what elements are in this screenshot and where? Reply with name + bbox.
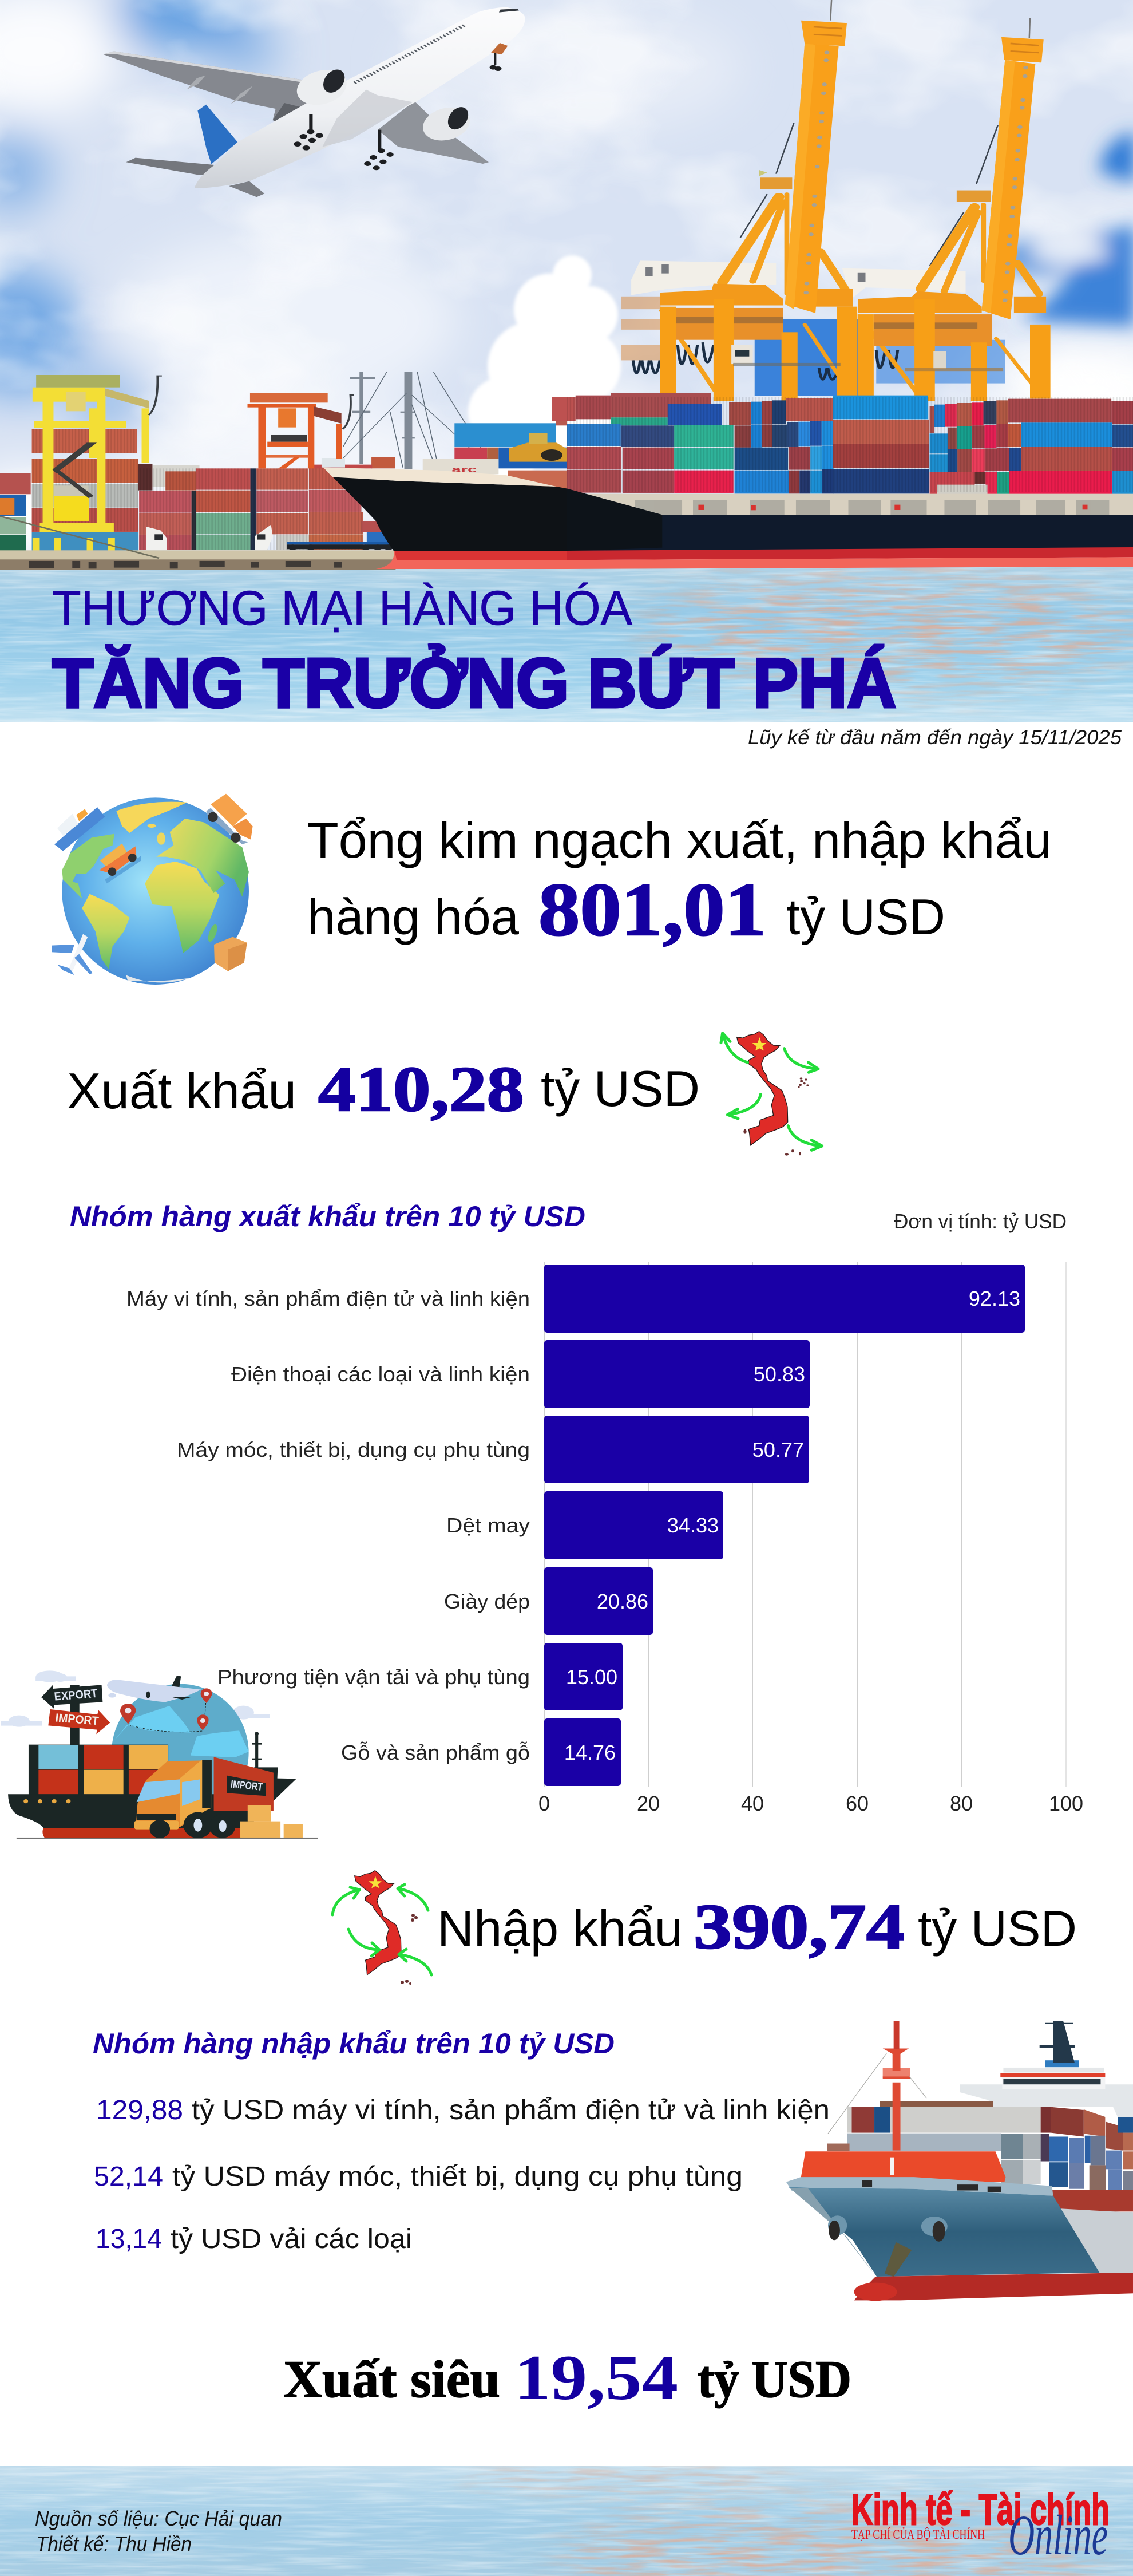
container ship deck stacks [552, 393, 1133, 515]
hero image: port scene [0, 0, 1133, 722]
export headline: tỷ USD [541, 1060, 700, 1117]
quay wall [0, 550, 395, 560]
designer credit: Thiết kế: Thu Hiền [36, 2532, 192, 2555]
trade surplus headline: tỷ USD [698, 2350, 851, 2408]
superstructure [960, 2084, 1133, 2117]
airplane icon [68, 934, 88, 971]
small ship icon [54, 807, 105, 851]
import sign: IMPORT [55, 1710, 100, 1728]
item: machinery: tỷ USD máy móc, thiết bị, dụng cụ phụ tùng [172, 2162, 743, 2192]
total headline line two: hàng hóa [307, 888, 519, 945]
total headline line one: Tổng kim ngạch xuất, nhập khẩu [307, 812, 1052, 868]
sea water [0, 564, 1133, 722]
export headline [67, 1054, 700, 1125]
bar values: 50.83 [754, 1362, 805, 1386]
light pole and mast [340, 372, 495, 471]
airplane [104, 7, 525, 197]
ship [8, 1745, 296, 1838]
title: line one: THƯƠNG MẠI HÀNG HÓA [52, 581, 632, 635]
total headline line two: 801,01 [538, 867, 766, 951]
export sign: EXPORT [54, 1686, 98, 1703]
white machine houses [631, 260, 776, 295]
orange gantry crane [248, 393, 342, 468]
plane engines [287, 64, 357, 111]
booms [785, 44, 839, 313]
publication logo: TẠP CHÍ CỦA BỘ TÀI CHÍNH [851, 2527, 985, 2542]
illustration: container ship bow [786, 2021, 1133, 2301]
export headline: Xuất khẩu [67, 1062, 296, 1119]
import headline: 390,74 [694, 1891, 905, 1962]
illustration: import export logistics [1, 1670, 318, 1839]
truck icon [211, 794, 247, 826]
red bottom hull [854, 2273, 1133, 2300]
red forecastle and mast [801, 2151, 1005, 2182]
yellow gantry crane [33, 375, 149, 551]
panel title: import groups: Nhóm hàng nhập khẩu trên 10 tỷ USD [93, 2028, 615, 2060]
bar values: 92.13 [969, 1287, 1020, 1310]
truck [134, 1757, 274, 1838]
bar values: 15.00 [566, 1665, 617, 1689]
import headline [437, 1891, 1077, 1962]
category labels: Gỗ và sản phẩm gỗ [341, 1741, 530, 1764]
deck level [566, 494, 1133, 515]
orange ship-to-shore cranes [621, 0, 1051, 401]
item: fabrics: tỷ USD vải các loại [171, 2224, 412, 2254]
import sign [48, 1709, 110, 1734]
category labels: Phương tiện vận tải và phụ tùng [217, 1665, 530, 1689]
chart title: export groups: Nhóm hàng xuất khẩu trên 10 tỷ USD [70, 1200, 585, 1232]
icon: Vietnam map with outgoing arrows [721, 1032, 822, 1156]
import item list [94, 2095, 830, 2254]
bar values: 14.76 [564, 1741, 616, 1764]
trade surplus headline: Xuất siêu [283, 2350, 500, 2408]
total headline line two [307, 867, 945, 951]
axis labels: 60 [846, 1792, 869, 1815]
plane fuselage [195, 7, 525, 188]
map pins [120, 1688, 212, 1730]
container ship hull: bow [323, 468, 566, 569]
category labels [126, 1287, 530, 1764]
trade surplus headline: 19,54 [514, 2342, 678, 2413]
boom lamps [803, 50, 1028, 302]
axis labels: 20 [637, 1792, 660, 1815]
trade surplus headline [283, 2342, 851, 2413]
import headline: tỷ USD [918, 1900, 1077, 1957]
hoses [633, 342, 898, 380]
container stacks [0, 397, 566, 551]
unit note: Đơn vị tính: tỷ USD [894, 1210, 1067, 1233]
deck containers [880, 2101, 993, 2107]
axis labels: 80 [950, 1792, 973, 1815]
icon: globe with transport [52, 794, 253, 985]
landing gear [294, 52, 502, 170]
axis labels: 0 [538, 1792, 550, 1815]
bar values [564, 1287, 1020, 1764]
axis labels: 100 [1049, 1792, 1083, 1815]
category labels: Điện thoại các loại và linh kiện [231, 1362, 530, 1386]
category labels: Giày dép [444, 1590, 530, 1613]
category labels: Dệt may [446, 1514, 530, 1537]
bar chart: exports above 10 billion USD [126, 1262, 1083, 1815]
icon: Vietnam map with incoming arrows [332, 1871, 431, 1985]
airplane [107, 1676, 201, 1702]
parcel icon [214, 937, 247, 971]
bar values: 34.33 [667, 1514, 719, 1537]
item: machinery: 52,14 [94, 2162, 163, 2192]
export headline: 410,28 [318, 1054, 524, 1125]
parcels [240, 1805, 303, 1838]
braces and struts [661, 194, 1039, 393]
item: computers: 129,88 [96, 2095, 183, 2125]
gantry beams [660, 284, 1046, 346]
bar values: 50.77 [752, 1438, 804, 1461]
bar values: 20.86 [597, 1590, 648, 1613]
container ship hull: midship [566, 488, 1133, 569]
category labels: Máy vi tính, sản phẩm điện tử và linh kiện [126, 1287, 530, 1310]
sky with clouds [0, 0, 1133, 572]
bars [544, 1265, 1025, 1786]
total headline line two: tỷ USD [786, 888, 945, 945]
yellow wheel loader and cargo on deck [423, 433, 566, 474]
puffy white cloud [468, 255, 664, 490]
item: fabrics: 13,14 [96, 2224, 162, 2254]
date note: Lũy kế từ đầu năm đến ngày 15/11/2025 [748, 726, 1122, 749]
hull side [1059, 2208, 1133, 2273]
small container boat icon [99, 846, 136, 874]
port quay, gantries and container stacks on the left [0, 372, 566, 570]
axis labels: 40 [741, 1792, 764, 1815]
plane tail and stabilizers [197, 105, 237, 164]
anchors [828, 2215, 948, 2242]
footer band [0, 2466, 1133, 2576]
export sign [41, 1685, 102, 1709]
trucks [146, 525, 273, 550]
source credit: Nguồn số liệu: Cục Hải quan [35, 2507, 282, 2530]
import headline: Nhập khẩu [437, 1900, 683, 1957]
axis labels [538, 1792, 1083, 1815]
publication logo [851, 2486, 1110, 2567]
title: line two: TĂNG TRƯỞNG BỨT PHÁ [52, 644, 896, 722]
category labels: Máy móc, thiết bị, dụng cụ phụ tùng [177, 1438, 530, 1461]
item: computers: tỷ USD máy vi tính, sản phẩm điện tử và linh kiện [192, 2095, 830, 2125]
truck: IMPORT [230, 1779, 263, 1793]
yellow wheel loader and cargo on deck: arc [451, 465, 477, 474]
gantry legs [660, 299, 1051, 401]
plane wings [104, 51, 366, 132]
